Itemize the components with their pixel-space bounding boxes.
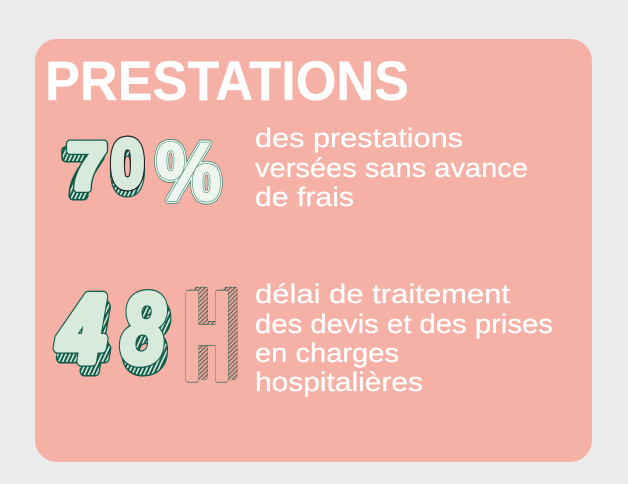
numeral 4: 4 — [60, 286, 108, 391]
numeral 7: 7 — [63, 136, 103, 210]
text: 48 H description — [255, 279, 553, 397]
numeral 8: 8 — [124, 281, 168, 393]
letter H: H — [192, 265, 240, 403]
numeral 0: 0 — [111, 132, 144, 208]
letter H — [183, 265, 240, 406]
percent sign: % — [156, 127, 221, 218]
letter H: H — [183, 268, 231, 406]
letter H: H — [183, 268, 231, 406]
letter H: H — [186, 267, 234, 405]
text: 70% description — [255, 123, 528, 212]
numeral 0: 0 — [111, 132, 144, 208]
text: 48 H description: hospitalières — [255, 367, 423, 397]
numeral 8: 8 — [121, 273, 165, 385]
numeral 4: 4 — [57, 276, 105, 381]
text: 70% description: de frais — [255, 182, 354, 212]
panel: prestations card — [35, 39, 592, 462]
text: 70% description: des prestations — [255, 123, 463, 153]
percent sign: % — [156, 127, 221, 218]
stat: 48 H figure — [57, 265, 240, 406]
numeral 4: 4 — [59, 281, 107, 386]
numeral 0: 0 — [111, 126, 144, 202]
text: 48 H description: en charges — [255, 338, 399, 368]
letter H: H — [189, 266, 237, 404]
numeral 0: 0 — [111, 126, 144, 202]
title: PRESTATIONS — [45, 49, 409, 112]
text: 48 H description: délai de traitement — [255, 279, 511, 309]
percent sign: % — [156, 127, 221, 218]
letter H: H — [192, 265, 240, 403]
numeral 7: 7 — [63, 136, 103, 210]
text: 70% description: versées sans avance — [255, 153, 528, 183]
text: 48 H description: des devis et des prises — [255, 309, 553, 339]
numeral 7: 7 — [67, 129, 107, 203]
numeral 8: 8 — [121, 273, 165, 385]
numeral 4: 4 — [60, 286, 108, 391]
stat: 70% figure — [63, 126, 221, 218]
numeral 7: 7 — [67, 129, 107, 203]
numeral 8: 8 — [124, 281, 168, 393]
percent sign: % — [156, 127, 221, 218]
numeral 4: 4 — [57, 276, 105, 381]
